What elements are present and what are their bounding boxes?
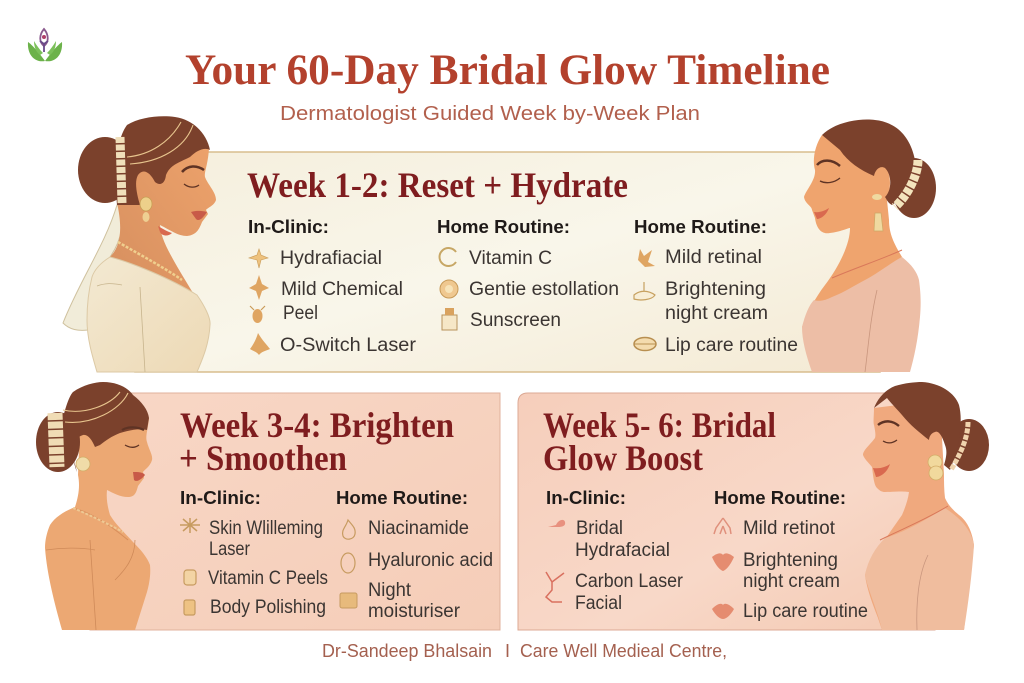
figure: bride right [802, 120, 936, 372]
footer: Care Well Medieal Centre, [520, 641, 727, 661]
column: in-clinic: Body Polishing [210, 597, 326, 618]
heading [179, 405, 454, 478]
column: in-clinic [248, 217, 417, 356]
panel: week 3-4 [36, 382, 500, 630]
heading [543, 405, 776, 478]
figure: bride lower left [36, 382, 152, 630]
panel background [135, 152, 880, 372]
heading: Glow Boost [543, 438, 703, 478]
column: home routine: Lip care routine [743, 601, 868, 622]
heading: + Smoothen [179, 438, 347, 478]
column: home routine: Home Routine: [714, 488, 846, 508]
column: in-clinic: Laser [209, 539, 251, 560]
column: home routine: Mild retinot [743, 518, 836, 539]
column: in-clinic: Peel [283, 303, 318, 324]
column: in-clinic: O-Switch Laser [280, 335, 417, 356]
logo [28, 29, 62, 61]
column: home routine: Brightening [743, 550, 838, 571]
column: home routine 2: Home Routine: [634, 217, 767, 237]
column: home routine: Home Routine: [437, 217, 570, 237]
column: in-clinic: Skin Wlilleming [209, 518, 323, 539]
column: home routine: Sunscreen [470, 310, 561, 331]
title: Your 60-Day Bridal Glow Timeline [185, 47, 830, 94]
column: in-clinic: Mild Chemical [281, 279, 403, 300]
column: in-clinic: Bridal [576, 518, 623, 539]
column: in-clinic [546, 488, 684, 614]
panel: week 1-2 [63, 116, 936, 372]
column: home routine: Niacinamide [368, 518, 469, 539]
column: home routine [712, 488, 868, 622]
column: in-clinic: In-Clinic: [546, 488, 626, 508]
subtitle: Dermatologist Guided Week by-Week Plan [280, 103, 700, 125]
column: home routine: night cream [743, 571, 840, 592]
footer: Dr-Sandeep Bhalsain [322, 641, 492, 661]
column: home routine 2: Lip care routine [665, 335, 798, 356]
column: home routine 2 [634, 217, 798, 356]
column: home routine: Hyaluronic acid [368, 550, 493, 571]
column: in-clinic: Hydrafiacial [280, 248, 382, 269]
footer [322, 641, 727, 661]
heading: Week 3-4: Brighten [180, 405, 454, 445]
footer: I [505, 641, 510, 661]
column: home routine [437, 217, 619, 331]
column: home routine: Home Routine: [336, 488, 468, 508]
column: home routine: moisturiser [368, 601, 461, 622]
panel: week 5-6 [518, 382, 989, 630]
column: in-clinic: Facial [575, 593, 622, 614]
column: home routine: Vitamin C [469, 248, 552, 269]
column: in-clinic: In-Clinic: [180, 488, 261, 508]
column: home routine: Night [368, 580, 412, 601]
panel background [518, 393, 935, 630]
column: in-clinic [180, 488, 328, 618]
figure: bride left [63, 116, 216, 372]
column: home routine [336, 488, 493, 622]
column: home routine: Gentie estollation [469, 279, 619, 300]
heading: Week 5- 6: Bridal [543, 405, 776, 445]
column: home routine 2: night cream [665, 303, 768, 324]
figure: bride lower right [863, 382, 989, 630]
column: in-clinic: Vitamin C Peels [208, 568, 328, 589]
column: in-clinic: In-Clinic: [248, 217, 329, 237]
column: home routine 2: Mild retinal [665, 247, 762, 268]
panel background [90, 393, 500, 630]
column: in-clinic: Carbon Laser [575, 571, 684, 592]
column: in-clinic: Hydrafacial [575, 540, 670, 561]
column: home routine 2: Brightening [665, 279, 766, 300]
heading: Week 1-2: Reset + Hydrate [247, 165, 628, 205]
